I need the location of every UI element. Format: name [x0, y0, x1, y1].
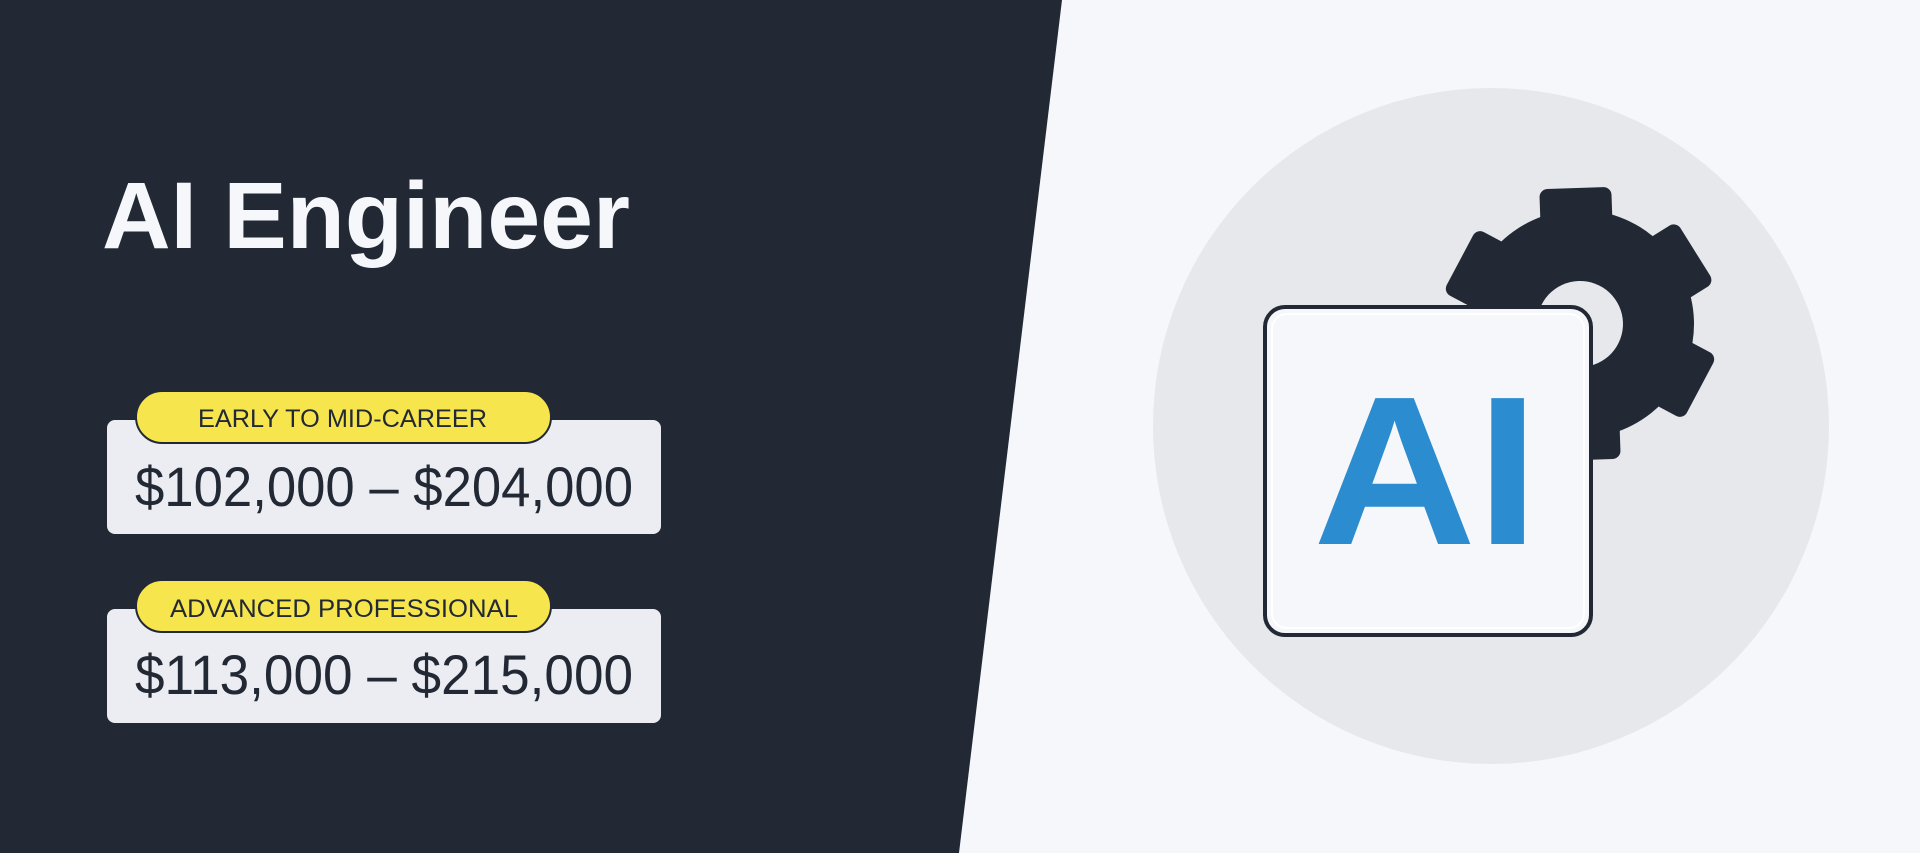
- salary card: early to mid-career: [107, 391, 661, 534]
- icon: gear: [1440, 183, 1720, 465]
- title: AI Engineer: [102, 163, 630, 269]
- badge: early to mid-career: [136, 391, 551, 443]
- badge: advanced professional: ADVANCED PROFESSIONAL: [170, 595, 518, 623]
- salary range 2: $113,000 – $215,000: [135, 643, 633, 706]
- salary range 1: $102,000 – $204,000: [135, 455, 633, 518]
- salary card: advanced professional: [107, 580, 661, 723]
- icon: AI chip box: AI: [1313, 352, 1539, 589]
- dark left panel: [0, 0, 1062, 853]
- badge: early to mid-career: EARLY TO MID-CAREER: [198, 405, 487, 433]
- background circle: [1153, 88, 1829, 764]
- icon: AI chip box: [1265, 307, 1591, 635]
- badge: advanced professional: [136, 580, 551, 632]
